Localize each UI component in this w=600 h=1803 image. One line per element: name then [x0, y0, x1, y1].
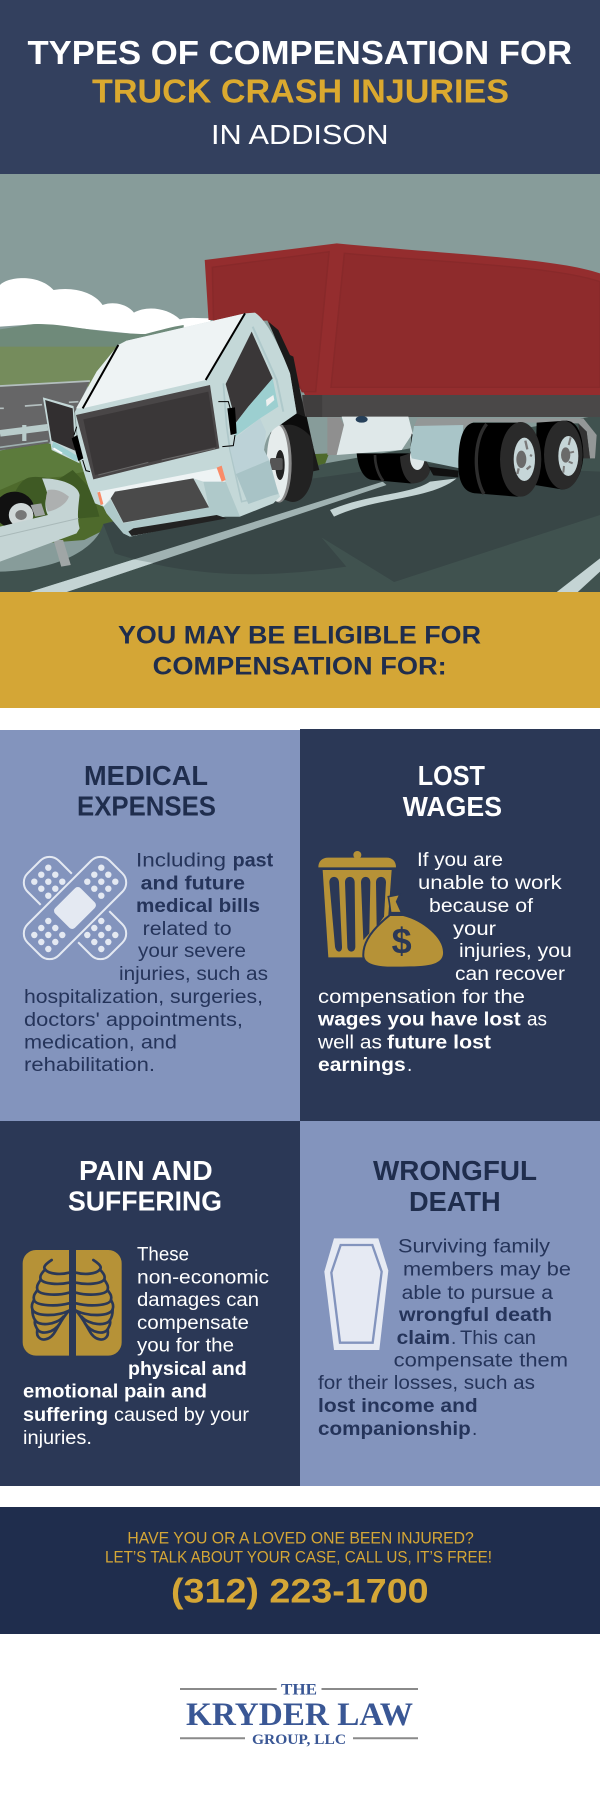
heading: medical expenses: MEDICAL [84, 760, 208, 791]
banner: eligibility heading: COMPENSATION FOR: [153, 653, 447, 681]
icon: crossed bandages [18, 851, 132, 965]
text: pain and suffering description: damages can [137, 1290, 259, 1311]
truck cab [72, 313, 319, 537]
text: lost wages description: earnings [318, 1055, 406, 1076]
text: wrongful death description: . [451, 1328, 456, 1349]
text: pain and suffering description: injuries. [23, 1428, 92, 1449]
heading: pain and suffering [68, 1155, 222, 1217]
header: title: TRUCK CRASH INJURIES [92, 73, 509, 110]
text: medical expenses description: Including [136, 851, 226, 872]
text: medical expenses description [24, 851, 274, 1076]
heading: wrongful death: WRONGFUL [373, 1155, 537, 1186]
text: pain and suffering description: you for the [137, 1336, 234, 1357]
logo: The Kryder Law Group: GROUP, LLC [252, 1732, 346, 1748]
icon: coffin [324, 1238, 388, 1350]
text: lost wages description: If you are [417, 850, 503, 871]
text: wrongful death description: . [472, 1419, 477, 1440]
logo: The Kryder Law Group: THE [281, 1682, 317, 1699]
crashed guardrail [0, 478, 80, 567]
illustration: crashed truck on highway [0, 174, 600, 592]
text: pain and suffering description: suffering [23, 1405, 108, 1426]
text: medical expenses description: medication, and [24, 1032, 177, 1054]
text: wrongful death description: members may be [403, 1260, 571, 1281]
icon: trash can and money bag [318, 851, 444, 968]
heading: wrongful death: DEATH [409, 1186, 501, 1217]
text: medical expenses description: doctors' appointments, [24, 1010, 243, 1031]
text: lost wages description [317, 850, 572, 1076]
text: wrongful death description: for their losses, such as [318, 1373, 535, 1394]
text: pain and suffering description: emotional pain and [23, 1382, 207, 1403]
heading: wrongful death [373, 1155, 537, 1217]
call to action band [0, 1507, 600, 1634]
icon: rib cage [23, 1248, 122, 1357]
panel: lost wages [300, 729, 600, 1121]
text: pain and suffering description: These [137, 1245, 189, 1266]
text: wrongful death description: companionship [318, 1419, 471, 1440]
heading: pain and suffering: PAIN AND [79, 1155, 213, 1186]
banner: eligibility heading: YOU MAY BE ELIGIBLE FOR [118, 621, 481, 649]
rear chassis and wheels [327, 416, 597, 517]
text: lost wages description: can recover [455, 964, 566, 985]
text: lost wages description: compensation for the [318, 987, 525, 1008]
text: pain and suffering description: caused by your [114, 1405, 250, 1426]
text: lost wages description: unable to work [418, 873, 562, 894]
panel: wrongful death [300, 1121, 600, 1486]
text: medical expenses description: related to [143, 919, 232, 940]
text: pain and suffering description [23, 1245, 269, 1449]
text: medical expenses description: hospitalization, surgeries, [24, 987, 263, 1008]
text: pain and suffering description: physical and [128, 1359, 247, 1380]
text: wrongful death description: compensate them [394, 1351, 568, 1372]
heading: lost wages: LOST [418, 760, 485, 791]
text: wrongful death description: Surviving family [398, 1237, 551, 1258]
text: wrongful death description: lost income and [318, 1396, 478, 1417]
logo: The Kryder Law Group [180, 1682, 418, 1748]
heading: pain and suffering: SUFFERING [68, 1186, 222, 1217]
icon: trash can and money bag: $ [392, 920, 412, 961]
text: medical expenses description: your severe [138, 941, 246, 962]
panel: pain and suffering [0, 1121, 300, 1486]
heading: medical expenses: EXPENSES [77, 791, 216, 822]
panel: medical expenses [0, 730, 300, 1121]
text: medical expenses description: injuries, such as [119, 964, 268, 985]
text: lost wages description: future lost [387, 1032, 492, 1054]
header: title: TYPES OF COMPENSATION FOR [28, 34, 572, 71]
header: title [0, 0, 600, 174]
text: medical expenses description: and future [141, 874, 245, 894]
heading: medical expenses [77, 760, 216, 822]
text: wrongful death description [318, 1237, 571, 1440]
text: lost wages description: because of [429, 896, 534, 917]
logo: The Kryder Law Group: KRYDER LAW [186, 1697, 413, 1733]
call to action band: HAVE YOU OR A LOVED ONE BEEN INJURED? [127, 1529, 474, 1547]
text: lost wages description: as [527, 1010, 547, 1030]
text: wrongful death description: able to pursue a [402, 1283, 553, 1304]
header: title: IN ADDISON [211, 119, 388, 150]
heading: lost wages [403, 760, 502, 822]
text: medical expenses description: rehabilitation. [24, 1055, 155, 1076]
text: wrongful death description: wrongful death [398, 1305, 552, 1326]
text: lost wages description: wages you have lost [317, 1010, 521, 1030]
text: medical expenses description: medical bills [136, 896, 260, 917]
banner: eligibility heading [0, 592, 600, 708]
text: lost wages description: well as [317, 1032, 382, 1054]
text: lost wages description: . [407, 1055, 412, 1076]
text: lost wages description: injuries, you [459, 941, 572, 962]
text: wrongful death description: claim [397, 1328, 450, 1349]
text: medical expenses description: past [233, 851, 274, 872]
open cab door [43, 397, 80, 463]
call to action band: (312) 223-1700 [171, 1573, 429, 1611]
text: pain and suffering description: non-economic [137, 1268, 269, 1288]
call to action band: LET’S TALK ABOUT YOUR CASE, CALL US, IT’S FREE! [105, 1549, 492, 1567]
text: pain and suffering description: compensate [137, 1313, 249, 1334]
text: lost wages description: your [453, 919, 497, 940]
heading: lost wages: WAGES [403, 791, 502, 822]
text: wrongful death description: This can [460, 1328, 536, 1349]
